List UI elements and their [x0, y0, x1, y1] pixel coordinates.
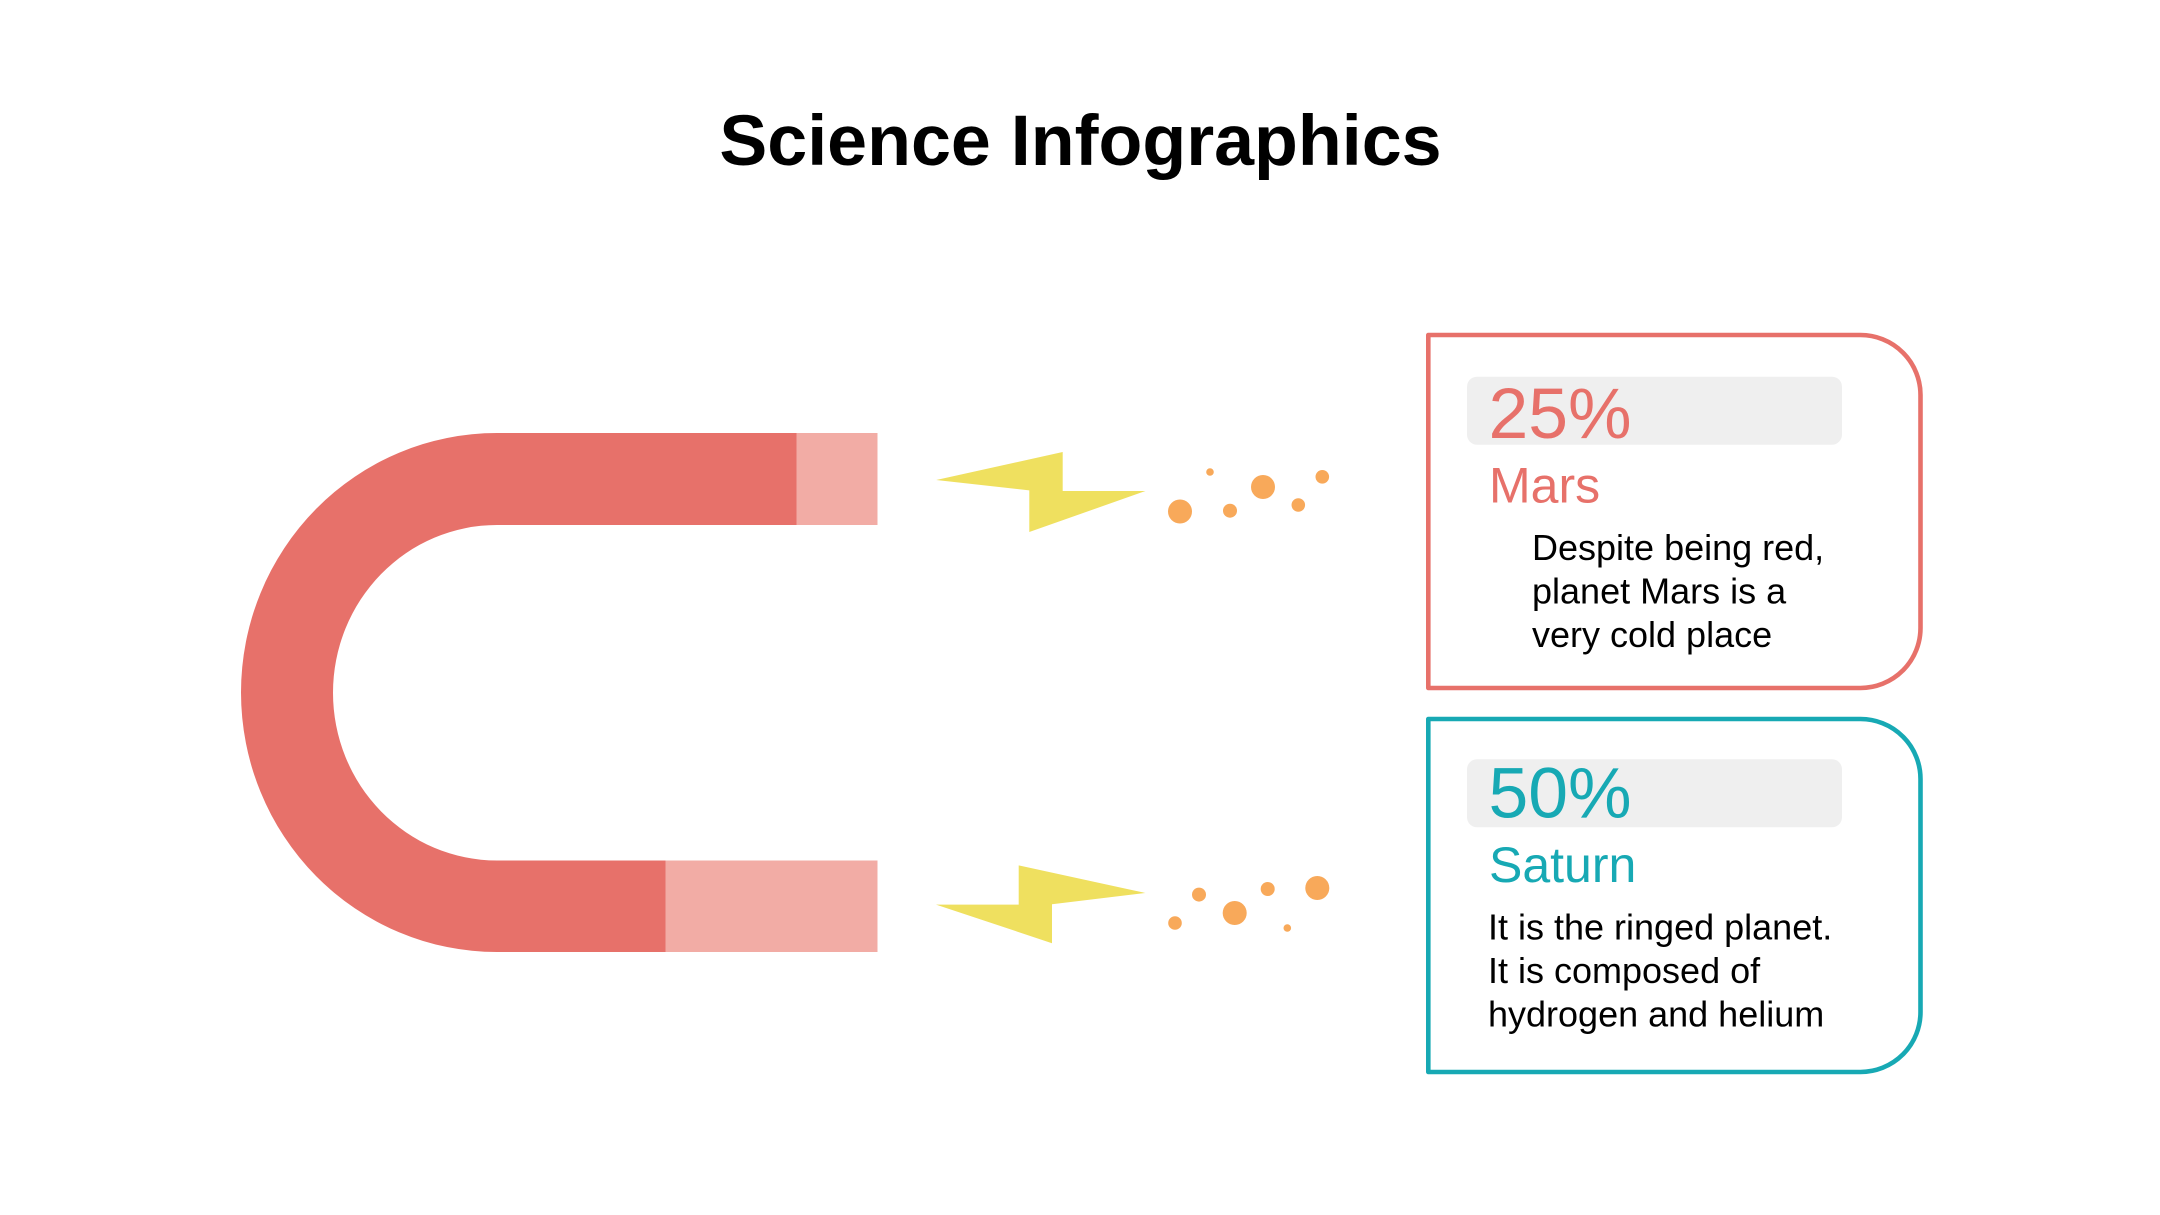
Saturn percentage: 50% [1488, 754, 1632, 834]
icon: top lightning bolt [936, 452, 1146, 532]
Saturn description: It is the ringed planet. [1488, 906, 1832, 948]
Mars percentage background [1467, 377, 1842, 445]
Saturn description: hydrogen and helium [1488, 993, 1824, 1034]
Mars percentage: 25% [1488, 374, 1632, 454]
Mars heading: Mars [1489, 458, 1600, 514]
panel: Saturn [1428, 719, 1920, 1072]
top particles [1168, 468, 1329, 524]
magnet bottom tip [666, 860, 878, 952]
magnet [241, 433, 878, 952]
Saturn card border [1428, 719, 1920, 1072]
magnet top tip [796, 433, 878, 525]
Saturn percentage background [1467, 759, 1842, 827]
bottom particles [1168, 876, 1329, 932]
title: Science Infographics [719, 101, 1442, 181]
panel: Mars [1428, 335, 1920, 688]
Saturn description: It is composed of [1488, 950, 1761, 991]
Mars description: very cold place [1532, 614, 1772, 655]
Mars description: Despite being red, [1532, 527, 1824, 568]
Saturn heading: Saturn [1489, 837, 1636, 893]
icon: bottom lightning bolt [936, 865, 1146, 943]
Mars description: planet Mars is a [1532, 570, 1787, 612]
Mars card border [1428, 335, 1920, 688]
magnet body [241, 433, 796, 952]
